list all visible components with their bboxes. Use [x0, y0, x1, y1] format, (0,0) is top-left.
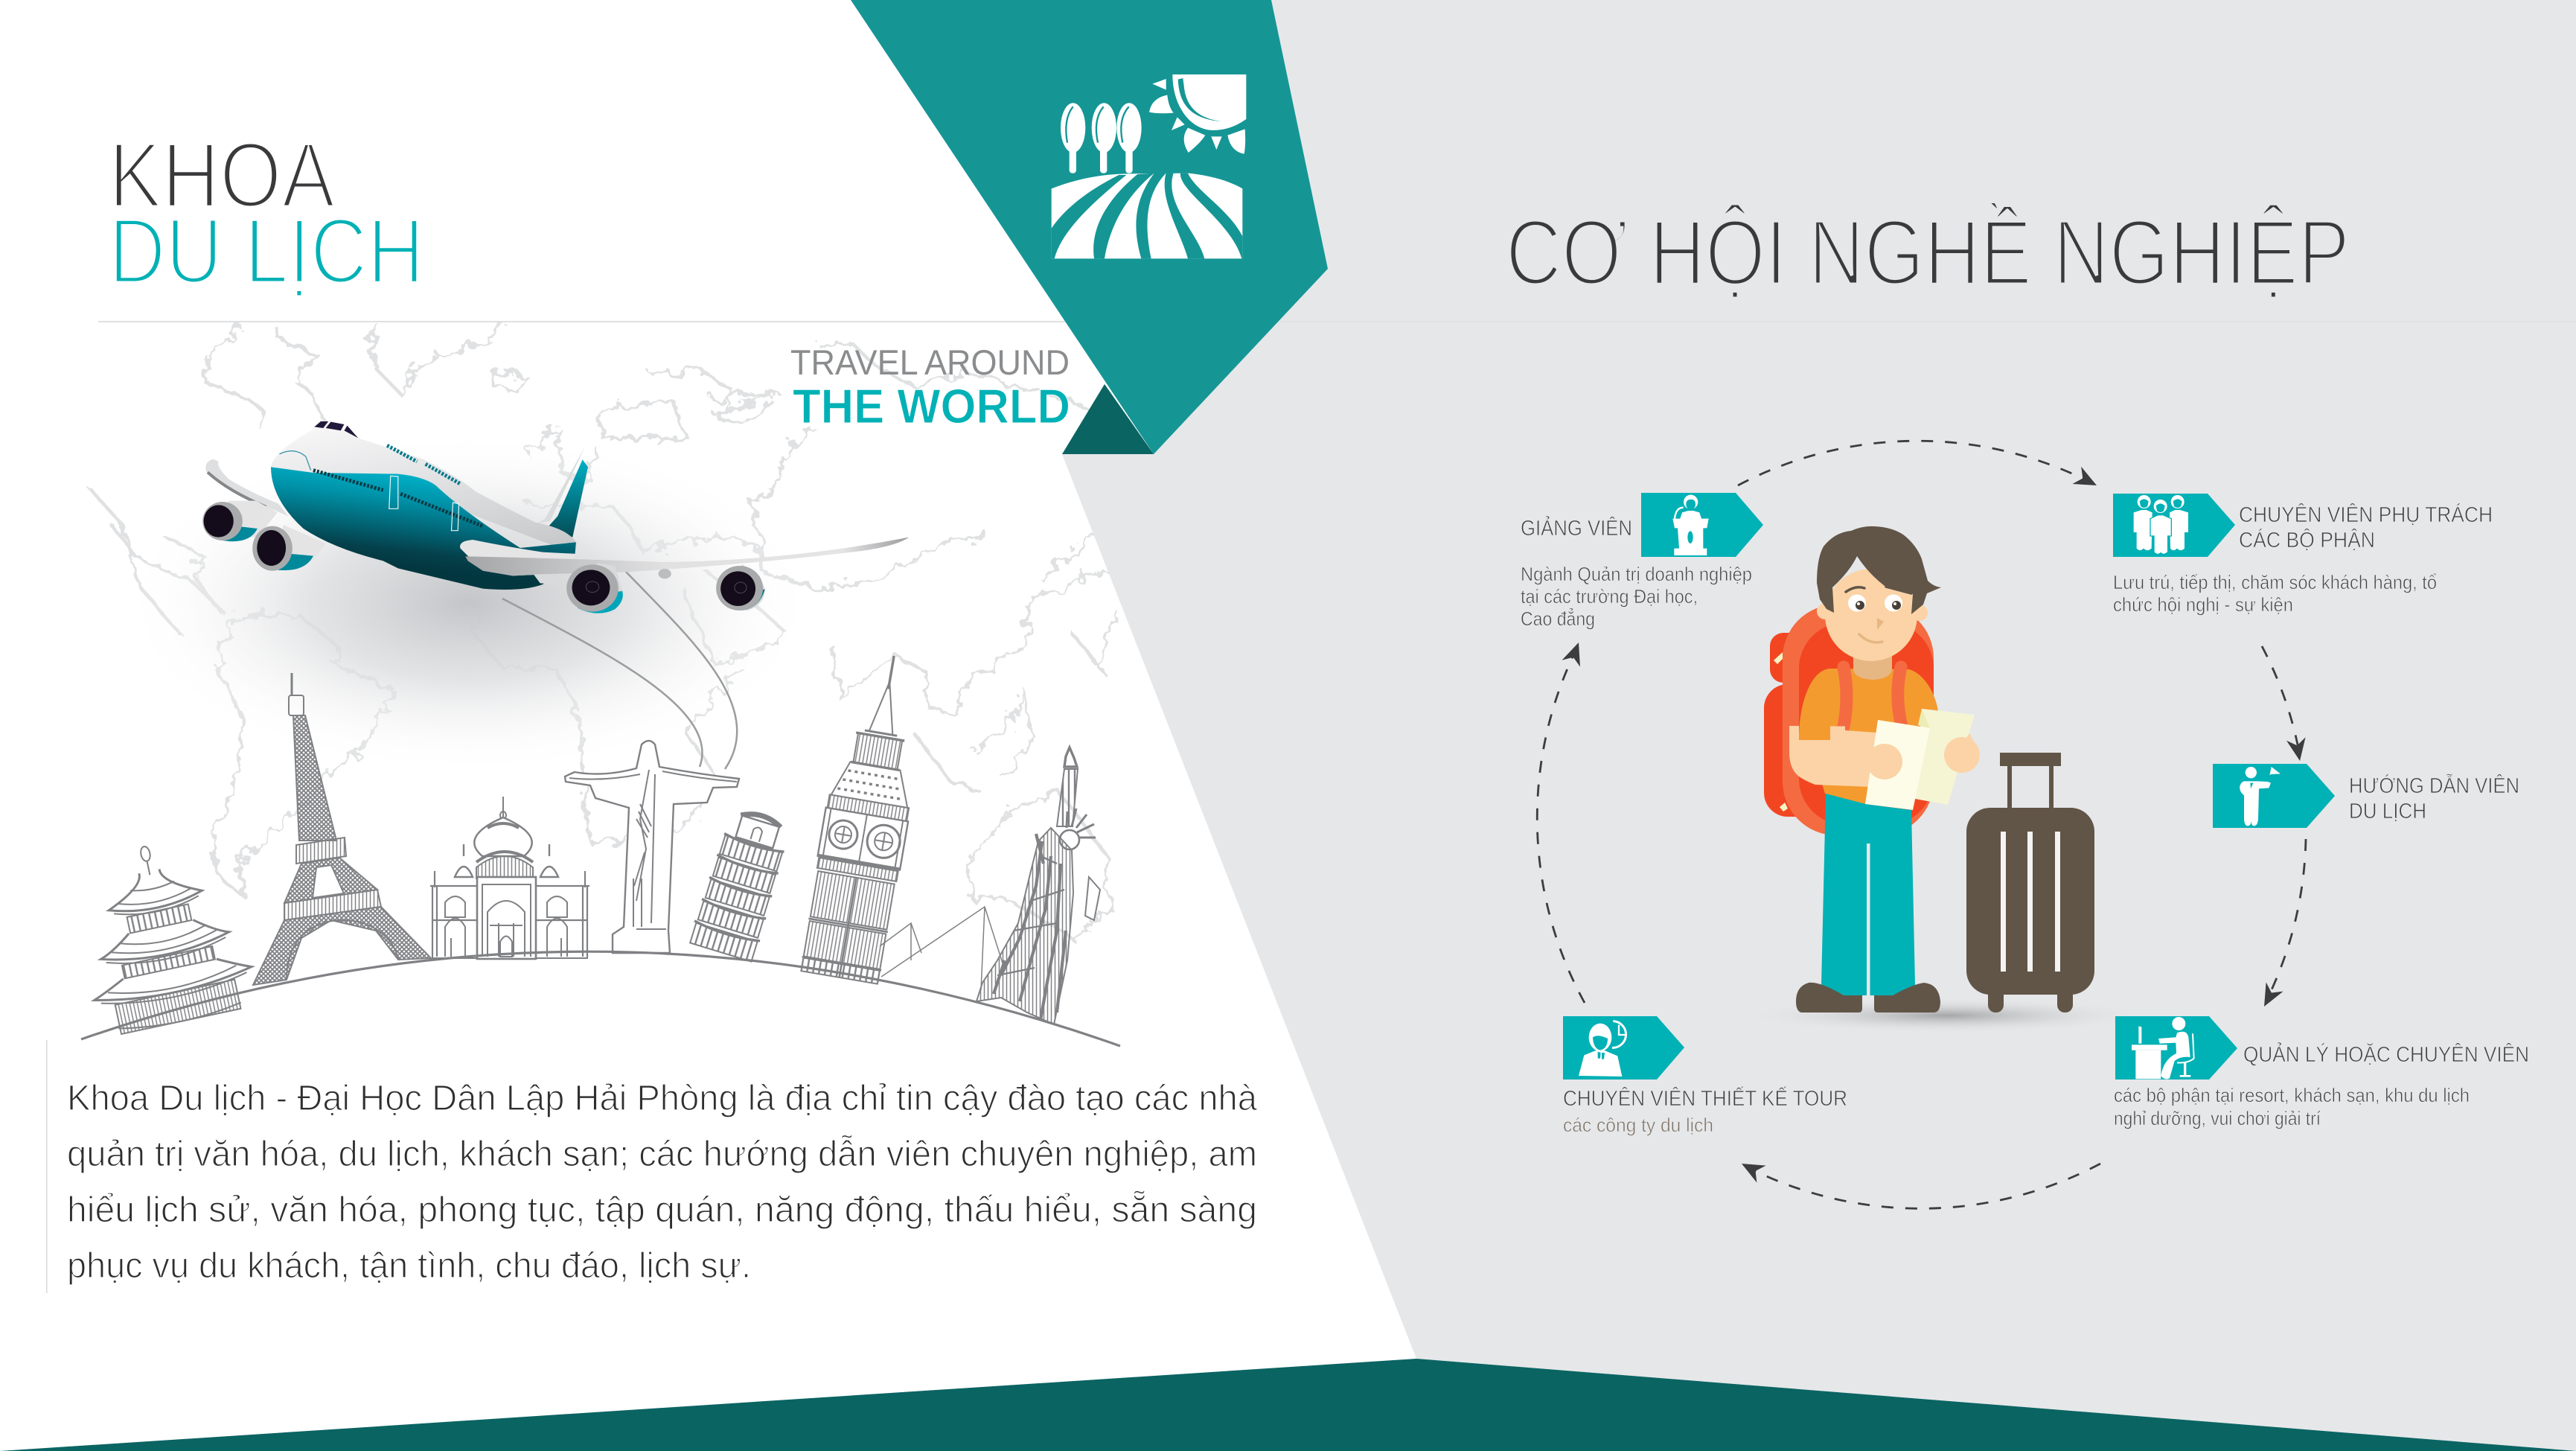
icon: sun, trees and field [1052, 74, 1246, 258]
tagline: travel around the world [790, 342, 1070, 433]
career: chuyên viên thiết kế tour [1563, 1016, 1847, 1136]
title text: CHUYÊN VIÊN THIẾT KẾ TOUR [1563, 1085, 1847, 1111]
near wing [460, 538, 909, 584]
arrowheads [1562, 467, 2310, 1183]
landmark: big ben [798, 649, 935, 984]
career: hướng dẫn viên du lịch [2213, 764, 2519, 828]
title text: GIẢNG VIÊN [1521, 515, 1632, 540]
eyes, nose, mouth [1846, 587, 1911, 642]
description [2113, 571, 2437, 616]
description: các công ty du lịch [1563, 1114, 1713, 1136]
bottom dark band [0, 1359, 2576, 1451]
tag with clock person icon [1563, 1016, 1684, 1080]
near engines [566, 563, 765, 613]
landmark: leaning tower of pisa [688, 806, 795, 962]
paragraph: faculty description: phục vụ du khách, tận tình, chu đáo, lịch sự. [67, 1246, 751, 1286]
shirt [1799, 669, 1938, 804]
description [1521, 563, 1752, 630]
description: tại các trường Đại học, [1521, 585, 1698, 607]
fuselage upper [271, 421, 576, 554]
windows and doors [279, 445, 483, 531]
fuselage lower [271, 467, 576, 590]
tag with staff icon [2113, 494, 2235, 557]
landmarks skyline [65, 649, 1120, 1046]
teal ribbon with field icon [851, 0, 1328, 454]
description: nghỉ dưỡng, vui chơi giải trí [2114, 1107, 2321, 1129]
world map outline [86, 322, 1131, 938]
description: Ngành Quản trị doanh nghiệp [1521, 563, 1752, 585]
tagline: travel around the world: THE WORLD [793, 379, 1070, 433]
title text: HƯỚNG DẪN VIÊN [2349, 773, 2519, 798]
cockpit [314, 421, 358, 438]
trousers [1821, 794, 1915, 995]
tag with lecturer icon [1641, 493, 1763, 557]
hair [1817, 526, 1941, 614]
heading: CƠ HỘI NGHỀ NGHIỆP: CƠ HỘI NGHỀ NGHIỆP [1506, 201, 2350, 304]
dashed career cycle arrows [1537, 441, 2306, 1208]
landmark: eiffel tower [253, 673, 431, 985]
description: chức hội nghị - sự kiện [2113, 593, 2293, 616]
landmark: christ the redeemer [565, 741, 739, 953]
description: Lưu trú, tiếp thị, chăm sóc khách hàng, tổ [2113, 571, 2437, 593]
landmark: temple of heaven [65, 830, 260, 1038]
title: KHOA DU LỊCH: KHOA [109, 124, 335, 227]
description: Cao đẳng [1521, 607, 1595, 630]
face [1817, 569, 1928, 661]
far wing [205, 459, 288, 516]
title: KHOA DU LỊCH: DU LỊCH [109, 200, 424, 303]
flight trails [502, 571, 737, 769]
title text [2239, 503, 2493, 552]
gray right panel [1062, 0, 2576, 1451]
backpack straps [1842, 667, 1902, 733]
title text: DU LỊCH [2349, 800, 2426, 823]
title text: CHUYÊN VIÊN PHỤ TRÁCH [2239, 503, 2493, 527]
career: chuyên viên phụ trách [2113, 494, 2493, 616]
ground arc [81, 951, 1120, 1046]
tag with guide icon [2213, 764, 2335, 828]
tail fin [537, 447, 588, 538]
suitcase [1966, 753, 2094, 1012]
title text [2349, 773, 2519, 823]
traveller ground shadow [1742, 998, 2151, 1033]
backpack [1764, 605, 1934, 835]
landmark: pyramids [880, 907, 1004, 990]
paragraph side rule [46, 1040, 48, 1293]
neck [1853, 652, 1892, 680]
landmark: statue of liberty [977, 747, 1100, 1024]
landmark: taj mahal [430, 797, 589, 959]
tagline: travel around the world: TRAVEL AROUND [790, 342, 1070, 382]
career: giảng viên [1521, 493, 1763, 630]
career: quản lý hoặc chuyên viên [2114, 1016, 2529, 1129]
paragraph: faculty description: quản trị văn hóa, du lịch, khách sạn; các hướng dẫn viên chuyên nghiệp, am [67, 1134, 1257, 1174]
map papers and hands [1865, 709, 1980, 810]
paragraph: faculty description [67, 1079, 1257, 1286]
paragraph: faculty description: Khoa Du lịch - Đại Học Dân Lập Hải Phòng là địa chỉ tin cậy đào tạo các nhà [67, 1079, 1257, 1118]
far engines [202, 501, 326, 571]
title text: CÁC BỘ PHẬN [2239, 527, 2375, 552]
title text: QUẢN LÝ HOẶC CHUYÊN VIÊN [2243, 1042, 2529, 1067]
title: KHOA DU LỊCH [109, 124, 424, 303]
character: backpacker [1764, 526, 1980, 1012]
description [2114, 1084, 2470, 1129]
header divider line [98, 321, 2576, 322]
tag with desk icon [2115, 1016, 2237, 1080]
plane shadow [119, 432, 819, 774]
paragraph: faculty description: hiểu lịch sử, văn hóa, phong tục, tập quán, năng động, thấu hiểu, sẵn sàng [67, 1190, 1257, 1230]
shoes [1796, 983, 1940, 1012]
airplane [202, 421, 909, 613]
arm [1789, 726, 1876, 787]
description: các bộ phận tại resort, khách sạn, khu du lịch [2114, 1084, 2470, 1106]
